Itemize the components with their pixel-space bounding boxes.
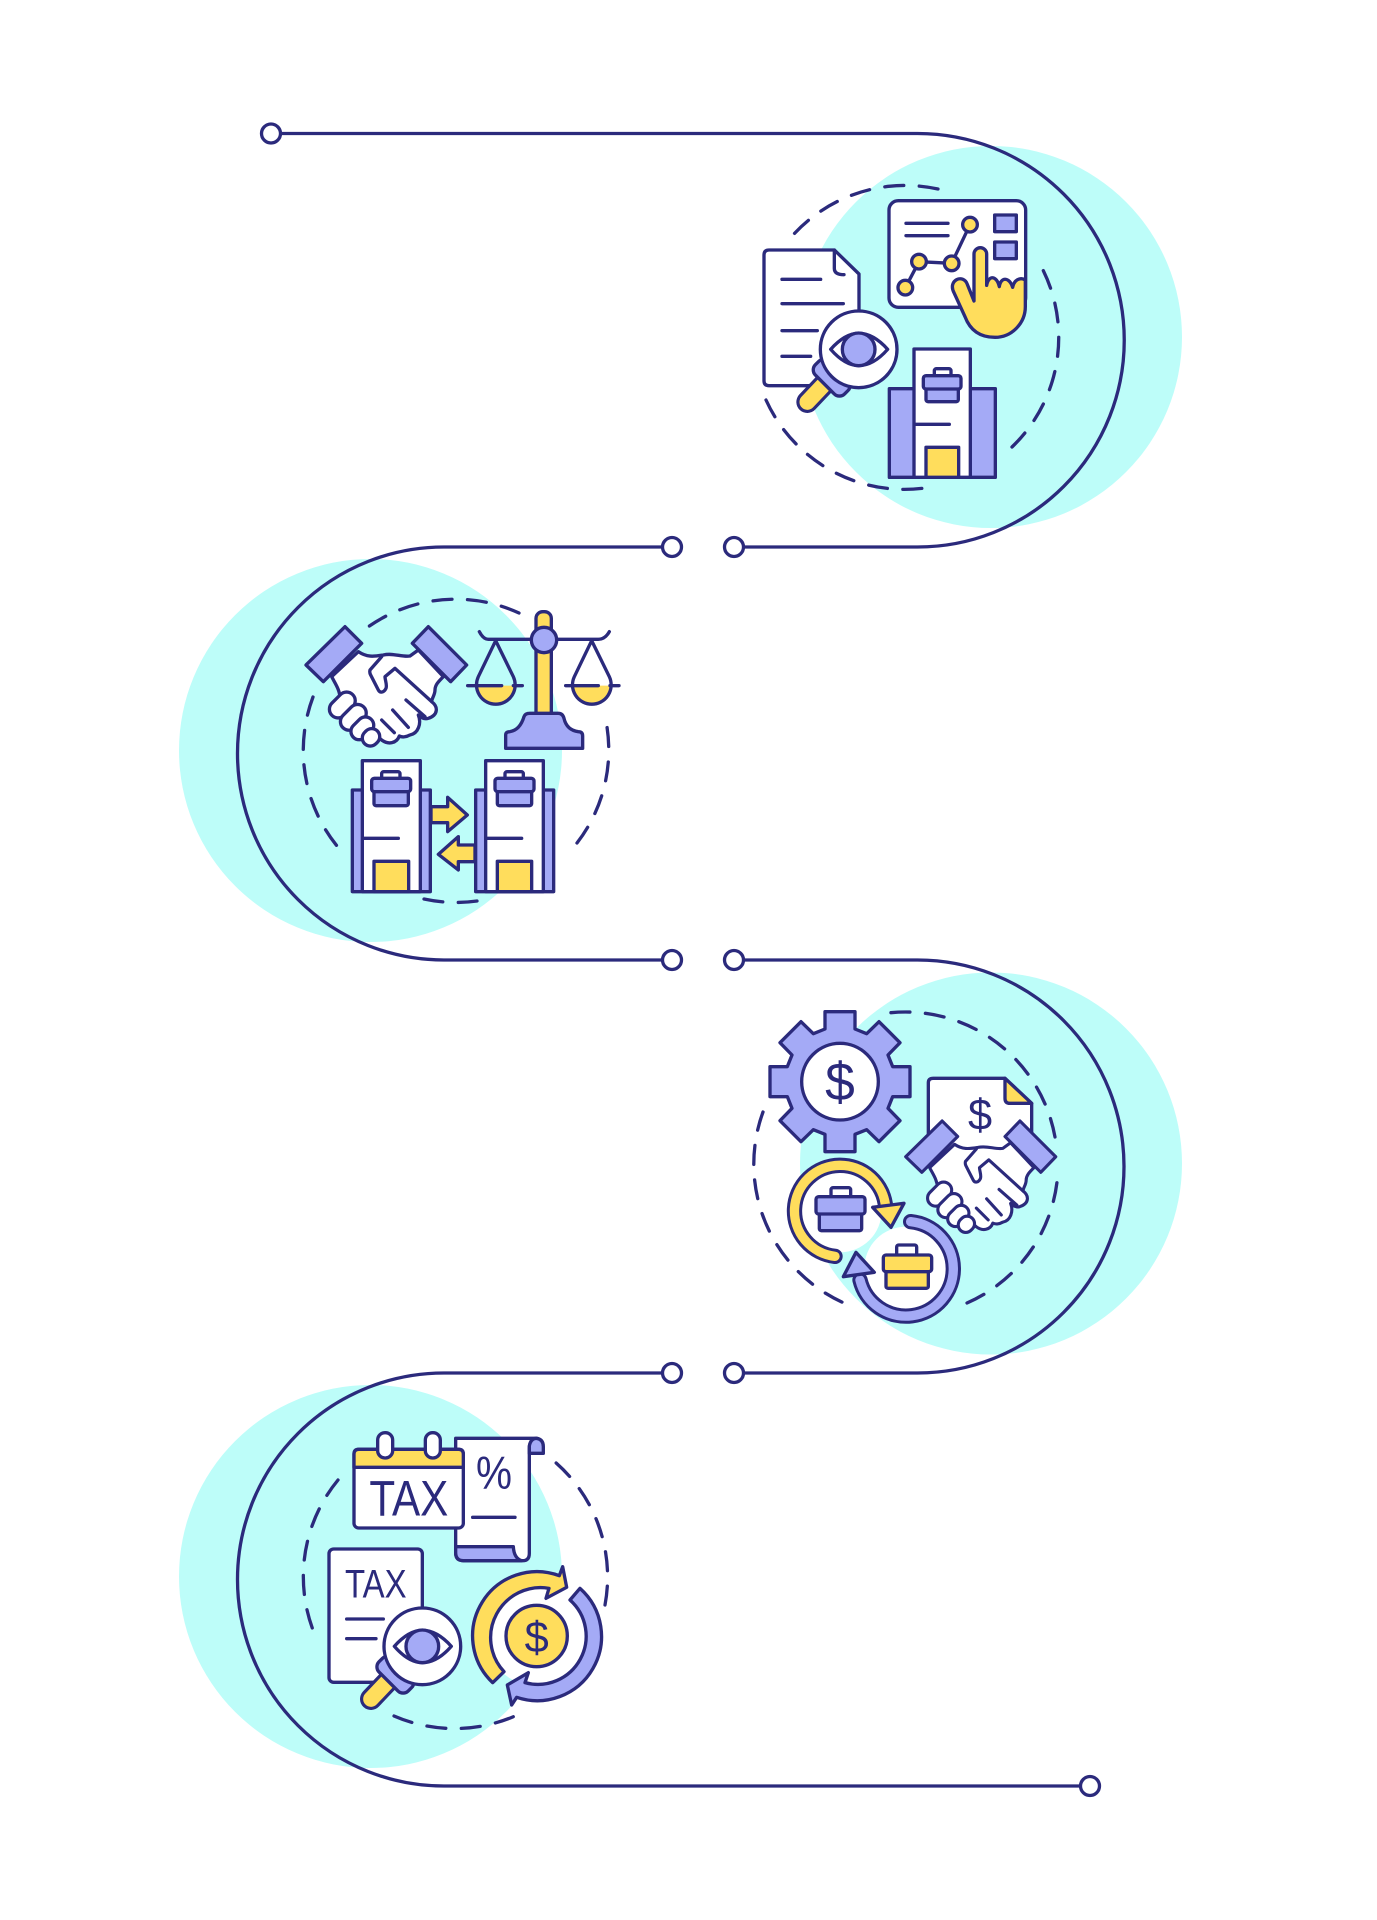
icon: office building with briefcase [889,349,995,477]
panel: step 2 background circle [179,559,562,942]
timeline nodes [262,124,1100,1796]
icon: analytics chart card with pointing hand [889,201,1026,337]
panel: step 4 icons [329,1433,602,1705]
dashed ring: step 3 [754,1012,1057,1303]
icon: right office building [476,761,554,892]
dashed ring: step 1 [766,185,1059,489]
icon: dollar coin with refresh arrows [473,1567,602,1705]
icon: tax document under magnifying eye [329,1549,461,1699]
icon: document under magnifying eye [764,250,897,402]
dashed ring: step 2 [303,599,609,902]
icon: handshake [306,627,467,749]
icon: exchange arrows [431,797,475,870]
panel: step 1 background circle [800,146,1182,528]
icon: tax calendar: TAX [369,1471,448,1527]
panel: step 3 background circle [800,972,1182,1354]
connector: serpentine timeline line [238,134,1124,1786]
icon: circular arrow with purple briefcase [794,1165,948,1310]
icon: percent receipt scroll: % [476,1446,512,1498]
icon: gear with dollar: $ [825,1054,855,1113]
dashed ring: step 4 [303,1462,608,1729]
icon: left office building [352,761,430,892]
icon: circular arrow with yellow briefcase [843,1222,953,1316]
icon: tax document under magnifying eye: TAX [345,1562,407,1606]
icon: dollar document and handshake: $ [968,1091,992,1139]
icon: dollar document and handshake [906,1078,1056,1236]
panel: step 2 icons [306,612,619,892]
icon: balance scales [468,612,619,748]
icon: tax calendar [354,1433,463,1528]
icon: percent receipt scroll [456,1438,543,1561]
icon: gear with dollar [770,1012,910,1152]
icon: dollar coin with refresh arrows: $ [525,1614,549,1662]
panel: step 4 background circle [179,1385,562,1768]
panel: step 3 icons [770,1012,1056,1316]
panel: step 1 icons [764,201,1026,477]
